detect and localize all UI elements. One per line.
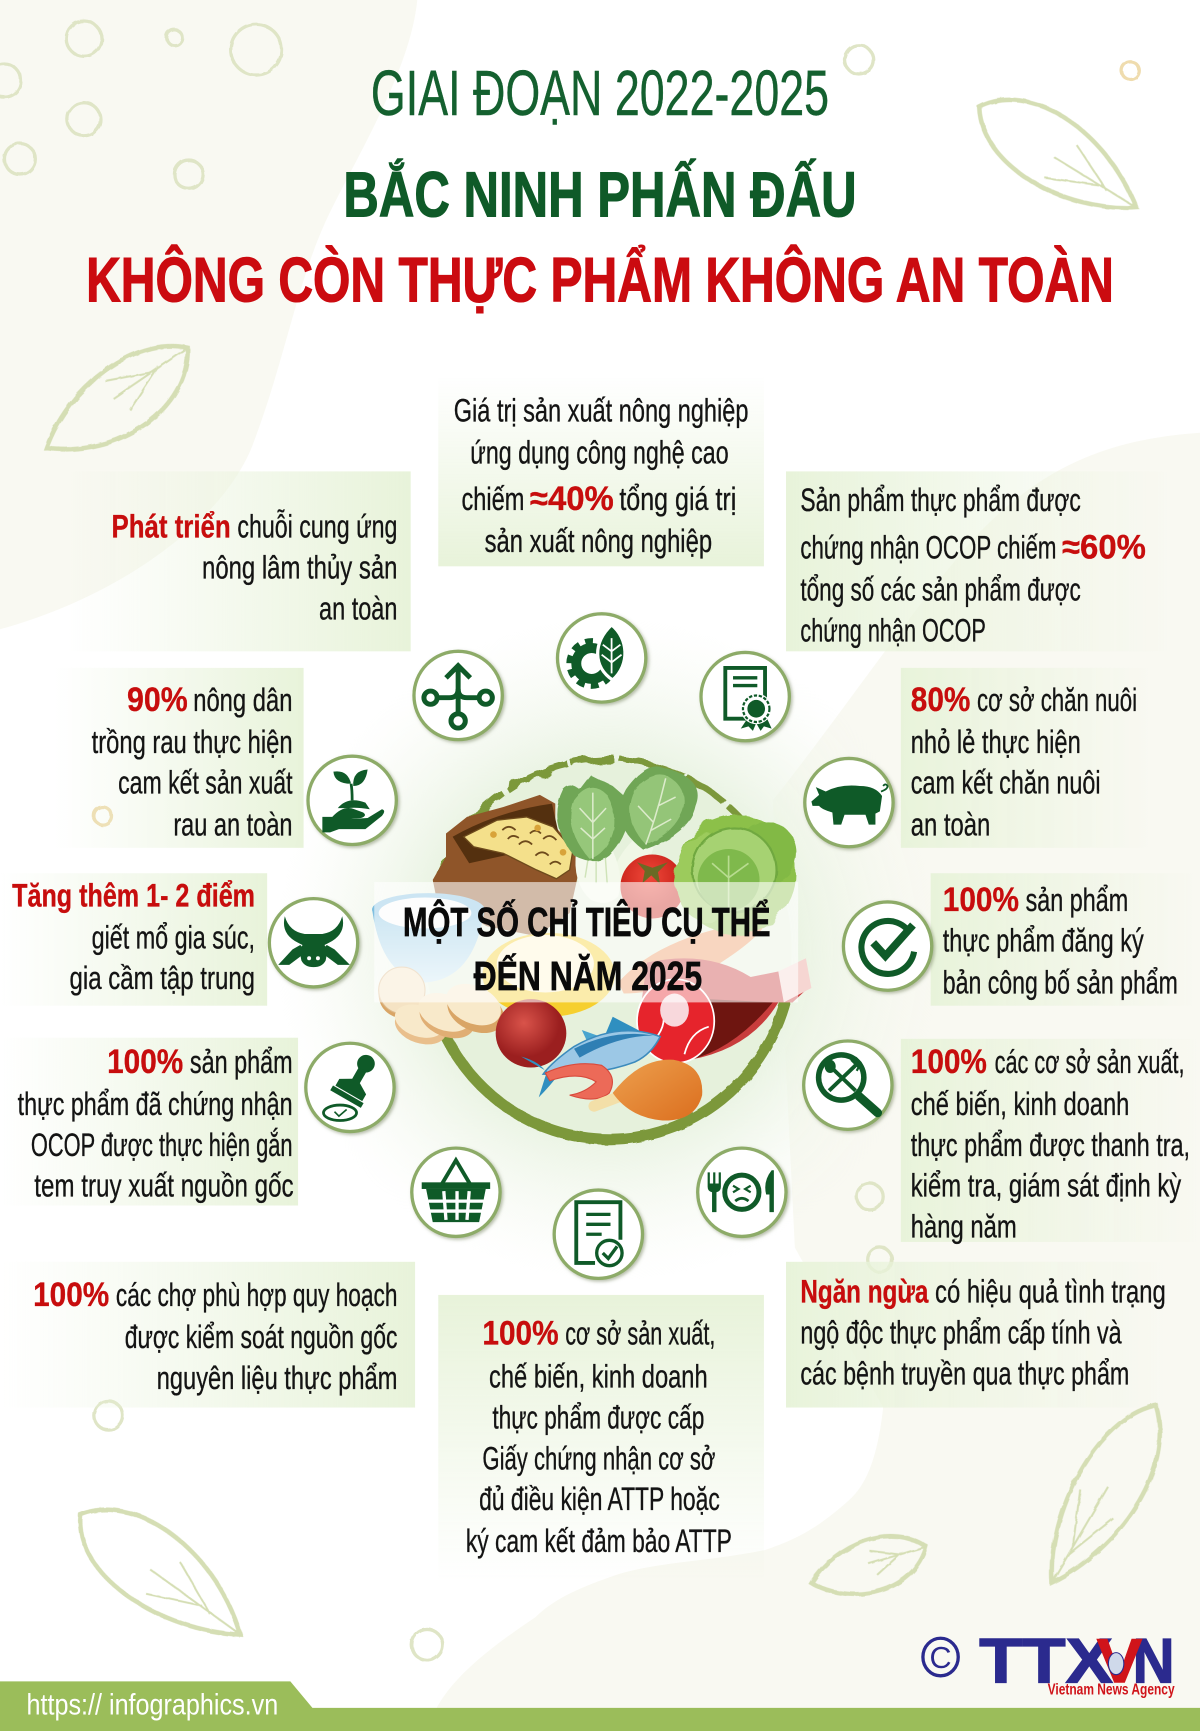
cabbage: [676, 815, 796, 934]
panel: vegetable farmers: [55, 668, 304, 848]
sack: [433, 795, 582, 936]
panel: OCOP traceability: sản phẩm: [190, 1044, 293, 1080]
icon: branching arrows: [414, 651, 502, 740]
panel: inspections: [901, 1039, 1200, 1245]
icon: sad plate with cutlery: [698, 1148, 786, 1236]
panel: OCOP share: tổng số các sản phẩm được: [800, 572, 1081, 608]
panel: inspections: hàng năm: [911, 1209, 1017, 1245]
panel: food safety certificates: ký cam kết đảm bảo ATTP: [466, 1523, 732, 1559]
panel: markets: nguyên liệu thực phẩm: [157, 1360, 397, 1396]
panel: product declaration: 100%: [943, 881, 1019, 919]
panel: food safety certificates: chế biến, kinh doanh: [489, 1359, 708, 1395]
panel: OCOP share: Sản phẩm thực phẩm được: [800, 482, 1081, 518]
panel: vegetable farmers: trồng rau thực hiện: [92, 724, 293, 760]
panel: value of high-tech agriculture: chiếm: [461, 481, 524, 517]
bread slices: [379, 967, 511, 1051]
panel: OCOP traceability: 100%: [107, 1043, 183, 1081]
panel: OCOP traceability: OCOP được thực hiện gắn: [31, 1127, 293, 1163]
panel: value of high-tech agriculture: tổng giá trị: [619, 481, 736, 517]
icon: check mark: [843, 902, 932, 990]
icon: document with check: [554, 1190, 643, 1278]
apple: [496, 999, 566, 1068]
carrot: [618, 920, 767, 994]
heading: period: GIAI ĐOẠN 2022-2025: [371, 57, 829, 129]
panel: safe supply chain: [66, 471, 411, 651]
tomato: [620, 854, 684, 918]
panel: food safety certificates: đủ điều kiện ATTP hoặc: [479, 1481, 720, 1517]
logo: copyright and TTXVN: [923, 1626, 1175, 1699]
heading: line 1: BẮC NINH PHẤN ĐẤU: [343, 157, 857, 230]
title: [86, 57, 1114, 315]
footer bar: [0, 1681, 1200, 1731]
panel: markets: các chợ phù hợp quy hoạch: [116, 1277, 397, 1313]
panel: slaughter points: [0, 873, 267, 1006]
footer url: https:// infographics.vn: [26, 1688, 278, 1721]
panel: markets: [0, 1262, 415, 1408]
panel: small livestock farms: 80%: [911, 681, 970, 719]
panel: vegetable farmers: rau an toàn: [173, 807, 293, 843]
panel: value of high-tech agriculture: sản xuất nông nghiệp: [485, 523, 712, 559]
panel: safe supply chain: nông lâm thủy sản: [202, 549, 397, 585]
logo: copyright and TTXVN: TTX: [979, 1626, 1113, 1696]
panel: food safety certificates: cơ sở sản xuất,: [565, 1316, 715, 1352]
panel: small livestock farms: cam kết chăn nuôi: [911, 765, 1101, 801]
panel: safe supply chain: Phát triển: [112, 509, 231, 545]
panel: food safety certificates: 100%: [482, 1315, 559, 1353]
panel: OCOP traceability: [0, 1038, 298, 1206]
panel: slaughter points: gia cầm tập trung: [70, 960, 255, 996]
panel: value of high-tech agriculture: ứng dụng công nghệ cao: [470, 435, 729, 471]
panel: small livestock farms: nhỏ lẻ thực hiện: [911, 724, 1081, 760]
chicken leg: [594, 1060, 702, 1121]
panel: OCOP share: [786, 471, 1172, 651]
banner line 1: MỘT SỐ CHỈ TIÊU CỤ THỂ: [403, 898, 771, 945]
panel: prevention: [786, 1262, 1167, 1408]
panel: food safety certificates: Giấy chứng nhận cơ sở: [482, 1440, 715, 1476]
logo: copyright and TTXVN: C: [930, 1640, 952, 1675]
shrimp: [545, 1064, 612, 1099]
plate ring: [425, 760, 792, 1139]
ham: [637, 958, 811, 1063]
panel: vegetable farmers: cam kết sản xuất: [118, 765, 293, 801]
panel: prevention: Ngăn ngừa: [800, 1274, 929, 1310]
panel: OCOP share: chứng nhận OCOP: [800, 612, 986, 648]
panel: product declaration: sản phẩm: [1026, 882, 1128, 918]
icon: certificate: [701, 652, 789, 741]
icon: magnifier with cutlery: [804, 1041, 892, 1129]
icon: pig: [805, 758, 893, 847]
panel: slaughter points: Tăng thêm 1- 2 điểm: [12, 877, 255, 913]
panel: safe supply chain: chuỗi cung ứng: [237, 509, 397, 545]
panel: value of high-tech agriculture: Giá trị sản xuất nông nghiệp: [454, 393, 748, 429]
logo: copyright and TTXVN: V: [1096, 1626, 1143, 1696]
panel: food safety certificates: thực phẩm được cấp: [492, 1400, 704, 1436]
panel: OCOP traceability: tem truy xuất nguồn gốc: [34, 1168, 294, 1204]
icon: shopping basket: [412, 1148, 500, 1236]
panel: small livestock farms: [901, 668, 1149, 848]
panel: vegetable farmers: nông dân: [193, 682, 293, 718]
panel: vegetable farmers: 90%: [127, 681, 188, 719]
center banner: [374, 882, 798, 1002]
logo: copyright and TTXVN: N: [1133, 1626, 1175, 1696]
panel: food safety certificates: [438, 1295, 764, 1582]
panel: product declaration: [931, 873, 1196, 1006]
icon: gear and leaf: [557, 614, 646, 702]
panel: markets: 100%: [33, 1276, 109, 1314]
panel: slaughter points: giết mổ gia súc,: [92, 919, 255, 955]
panel: value of high-tech agriculture: [438, 375, 764, 566]
food plate illustration: [372, 760, 811, 1139]
yellow fruit: [482, 933, 615, 1017]
icon: stamp: [306, 1043, 394, 1132]
panel: inspections: 100%: [911, 1043, 987, 1081]
icon: plant in hand: [308, 756, 396, 845]
icon: cattle and cleavers: [269, 899, 358, 987]
panel: markets: được kiểm soát nguồn gốc: [125, 1319, 397, 1355]
panel: small livestock farms: an toàn: [911, 807, 990, 843]
panel: OCOP traceability: thực phẩm đã chứng nhận: [18, 1086, 293, 1122]
panel: value of high-tech agriculture: ≈40%: [530, 480, 614, 518]
bowl of rice: [372, 893, 485, 983]
panel: inspections: chế biến, kinh doanh: [911, 1086, 1129, 1122]
panel: safe supply chain: an toàn: [319, 590, 397, 626]
center glow: [277, 618, 939, 1281]
bok choy: [557, 766, 698, 903]
panel: OCOP share: ≈60%: [1062, 529, 1146, 567]
banner line 2: ĐẾN NĂM 2025: [474, 953, 702, 999]
panel: OCOP share: chứng nhận OCOP chiếm: [800, 530, 1056, 566]
fish: [521, 1017, 660, 1097]
